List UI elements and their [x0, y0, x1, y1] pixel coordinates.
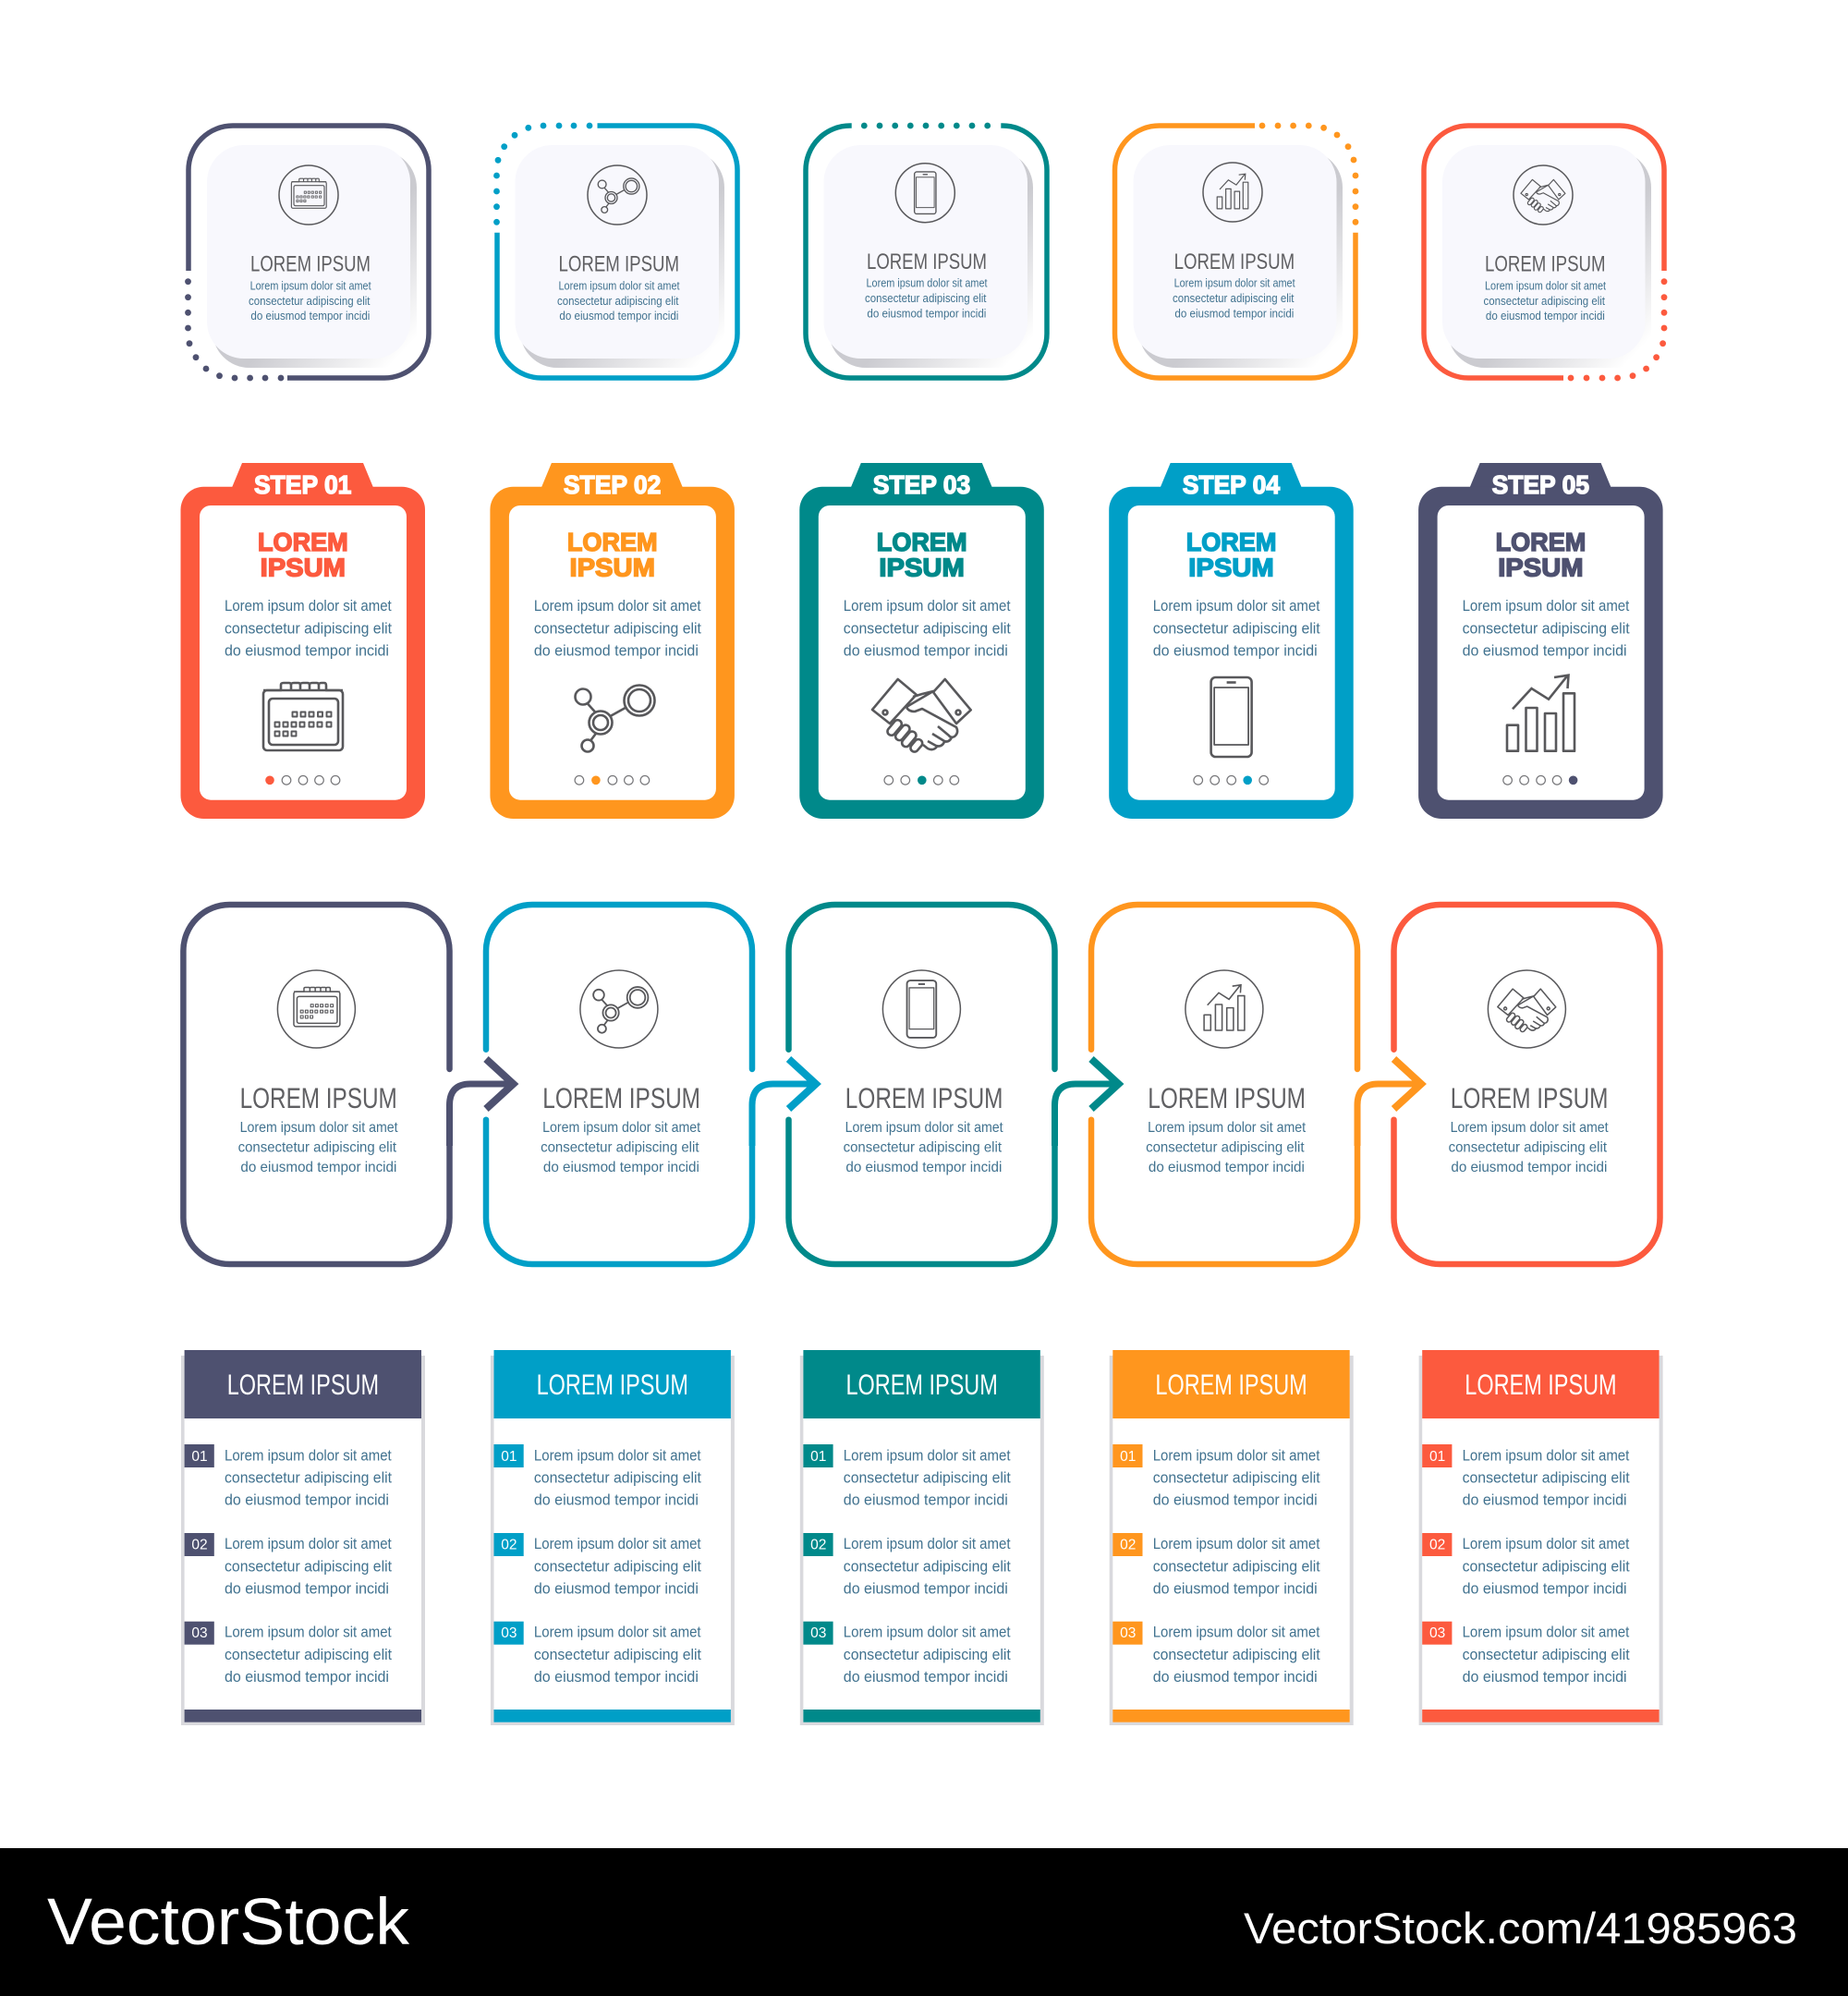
panel: list card coral: do eiusmod tempor incidi: [1463, 1669, 1627, 1686]
panel: step 02: consectetur adipiscing elit: [534, 621, 701, 638]
panel: card 2 blue: do eiusmod tempor incidi: [559, 309, 678, 323]
panel: list card coral: [1419, 1350, 1663, 1725]
arrow: card 1 to card 2: [449, 1059, 514, 1146]
panel: list card blue: consectetur adipiscing elit: [534, 1470, 701, 1487]
panel: list card navy: 03: [191, 1625, 208, 1641]
panel: list card navy: [181, 1350, 425, 1725]
panel: list card navy: 01: [191, 1449, 208, 1465]
panel: card 1 navy: Lorem ipsum dolor sit amet: [250, 278, 371, 292]
panel: list card teal: [800, 1350, 1044, 1725]
panel: card 5 coral: [1424, 126, 1667, 381]
panel: step 04: STEP 04: [1183, 470, 1280, 499]
panel: list card teal: 02: [810, 1538, 826, 1553]
panel: step 01: LOREM: [258, 528, 348, 556]
panel: step 02: do eiusmod tempor incidi: [534, 643, 699, 660]
panel: list card blue: Lorem ipsum dolor sit amet: [534, 1536, 701, 1552]
panel: list card orange: LOREM IPSUM: [1155, 1368, 1307, 1401]
panel: list card orange: [1110, 1350, 1354, 1725]
panel: step 02: Lorem ipsum dolor sit amet: [534, 598, 701, 615]
panel: list card teal: do eiusmod tempor incidi: [844, 1492, 1008, 1509]
row 3: connected outline cards with arrows: [183, 905, 1660, 1264]
panel: flow card 1: consectetur adipiscing elit: [238, 1140, 397, 1155]
panel: step 04: Lorem ipsum dolor sit amet: [1153, 598, 1320, 615]
panel: step 05: LOREM: [1496, 528, 1586, 556]
panel: flow card 5: LOREM IPSUM: [1451, 1081, 1608, 1114]
panel: step 04: do eiusmod tempor incidi: [1153, 643, 1318, 660]
panel: list card teal: 03: [810, 1625, 826, 1641]
panel: list card coral: Lorem ipsum dolor sit amet: [1463, 1447, 1630, 1464]
panel: list card blue: do eiusmod tempor incidi: [534, 1580, 699, 1597]
panel: card 1 navy: consectetur adipiscing elit: [249, 294, 371, 308]
panel: list card coral: 02: [1429, 1538, 1445, 1553]
panel: step 02: IPSUM: [569, 553, 655, 582]
panel: list card teal: Lorem ipsum dolor sit amet: [844, 1625, 1011, 1641]
panel: flow card 4: do eiusmod tempor incidi: [1149, 1160, 1305, 1175]
panel: list card blue: do eiusmod tempor incidi: [534, 1492, 699, 1509]
panel: card 5 coral: LOREM IPSUM: [1485, 251, 1606, 277]
panel: step 05: Lorem ipsum dolor sit amet: [1463, 598, 1630, 615]
panel: list card teal: do eiusmod tempor incidi: [844, 1580, 1008, 1597]
panel: flow card 5: consectetur adipiscing elit: [1449, 1140, 1608, 1155]
panel: list card orange: 03: [1120, 1625, 1136, 1641]
panel: step 03: Lorem ipsum dolor sit amet: [844, 598, 1011, 615]
panel: list card coral: consectetur adipiscing elit: [1463, 1470, 1630, 1487]
panel: flow card 2: consectetur adipiscing elit: [541, 1140, 699, 1155]
panel: flow card 4: LOREM IPSUM: [1148, 1081, 1306, 1114]
panel: list card coral: consectetur adipiscing elit: [1463, 1647, 1630, 1663]
panel: list card blue: 02: [501, 1538, 517, 1553]
panel: list card coral: LOREM IPSUM: [1465, 1368, 1617, 1401]
panel: card 1 navy: [185, 126, 429, 381]
panel: step 04: IPSUM: [1188, 553, 1274, 582]
panel: flow card 4: [1091, 905, 1357, 1264]
panel: list card navy: consectetur adipiscing elit: [225, 1470, 392, 1487]
panel: card 2 blue: consectetur adipiscing elit: [557, 294, 679, 308]
panel: list card navy: LOREM IPSUM: [227, 1368, 379, 1401]
panel: list card teal: do eiusmod tempor incidi: [844, 1669, 1008, 1686]
panel: list card orange: Lorem ipsum dolor sit amet: [1153, 1625, 1320, 1641]
panel: list card blue: consectetur adipiscing elit: [534, 1558, 701, 1575]
panel: list card coral: 03: [1429, 1625, 1445, 1641]
footer: black watermark band: VectorStock: [47, 1886, 410, 1959]
panel: list card navy: Lorem ipsum dolor sit amet: [225, 1625, 392, 1641]
panel: list card blue: do eiusmod tempor incidi: [534, 1669, 699, 1686]
arrow: card 3 to card 4: [1055, 1059, 1118, 1146]
panel: step 05: [1418, 463, 1663, 819]
panel: flow card 2: [486, 905, 752, 1264]
panel: list card blue: Lorem ipsum dolor sit amet: [534, 1625, 701, 1641]
panel: step 02: STEP 02: [564, 470, 661, 499]
panel: step 01: STEP 01: [254, 470, 351, 499]
panel: flow card 2: LOREM IPSUM: [542, 1081, 700, 1114]
panel: card 4 orange: do eiusmod tempor incidi: [1174, 307, 1294, 320]
panel: list card teal: consectetur adipiscing elit: [844, 1647, 1011, 1663]
panel: list card navy: consectetur adipiscing elit: [225, 1647, 392, 1663]
panel: list card orange: consectetur adipiscing elit: [1153, 1558, 1320, 1575]
panel: list card orange: 01: [1120, 1449, 1136, 1465]
panel: step 05: STEP 05: [1492, 470, 1589, 499]
panel: step 01: IPSUM: [261, 553, 346, 582]
panel: card 4 orange: consectetur adipiscing elit: [1173, 291, 1295, 305]
panel: list card navy: do eiusmod tempor incidi: [225, 1492, 389, 1509]
panel: list card orange: do eiusmod tempor incidi: [1153, 1669, 1318, 1686]
panel: list card teal: Lorem ipsum dolor sit amet: [844, 1536, 1011, 1552]
panel: flow card 1: do eiusmod tempor incidi: [240, 1160, 396, 1175]
panel: list card blue: LOREM IPSUM: [537, 1368, 688, 1401]
panel: flow card 5: do eiusmod tempor incidi: [1451, 1160, 1607, 1175]
panel: step 05: IPSUM: [1498, 553, 1584, 582]
panel: list card navy: consectetur adipiscing elit: [225, 1558, 392, 1575]
panel: step 04: [1109, 463, 1354, 819]
panel: list card blue: 03: [501, 1625, 517, 1641]
panel: step 05: do eiusmod tempor incidi: [1463, 643, 1627, 660]
panel: card 1 navy: do eiusmod tempor incidi: [250, 309, 370, 323]
panel: card 5 coral: consectetur adipiscing elit: [1484, 294, 1605, 308]
panel: card 4 orange: Lorem ipsum dolor sit amet: [1174, 275, 1295, 290]
panel: card 3 teal: Lorem ipsum dolor sit amet: [867, 275, 988, 290]
panel: step 03: consectetur adipiscing elit: [844, 621, 1011, 638]
panel: flow card 3: do eiusmod tempor incidi: [845, 1160, 1002, 1175]
panel: list card teal: consectetur adipiscing elit: [844, 1470, 1011, 1487]
panel: list card orange: 02: [1120, 1538, 1136, 1553]
panel: flow card 5: [1393, 905, 1660, 1264]
panel: card 2 blue: Lorem ipsum dolor sit amet: [558, 278, 680, 292]
panel: list card coral: Lorem ipsum dolor sit amet: [1463, 1536, 1630, 1552]
panel: card 4 orange: LOREM IPSUM: [1174, 250, 1295, 274]
panel: list card blue: [491, 1350, 735, 1725]
panel: card 3 teal: [806, 123, 1047, 378]
panel: flow card 3: [789, 905, 1055, 1264]
panel: card 3 teal: LOREM IPSUM: [867, 250, 987, 274]
panel: step 02: LOREM: [567, 528, 658, 556]
footer: black watermark band: [0, 1848, 1848, 1996]
footer: black watermark band: VectorStock.com/41985963: [1244, 1905, 1797, 1953]
panel: step 02: [490, 463, 735, 819]
panel: list card coral: Lorem ipsum dolor sit amet: [1463, 1625, 1630, 1641]
panel: step 03: [799, 463, 1044, 819]
panel: list card orange: do eiusmod tempor incidi: [1153, 1580, 1318, 1597]
panel: list card orange: Lorem ipsum dolor sit amet: [1153, 1447, 1320, 1464]
panel: list card orange: do eiusmod tempor incidi: [1153, 1492, 1318, 1509]
panel: card 3 teal: consectetur adipiscing elit: [865, 291, 987, 305]
panel: step 04: LOREM: [1186, 528, 1276, 556]
panel: flow card 5: Lorem ipsum dolor sit amet: [1451, 1120, 1609, 1136]
panel: list card teal: 01: [810, 1449, 826, 1465]
panel: step 03: do eiusmod tempor incidi: [844, 643, 1008, 660]
panel: list card blue: Lorem ipsum dolor sit amet: [534, 1447, 701, 1464]
panel: list card coral: do eiusmod tempor incidi: [1463, 1580, 1627, 1597]
panel: step 03: IPSUM: [879, 553, 965, 582]
panel: list card coral: do eiusmod tempor incidi: [1463, 1492, 1627, 1509]
row 1: rounded cards with dotted outline: [185, 123, 1667, 381]
panel: list card coral: consectetur adipiscing elit: [1463, 1558, 1630, 1575]
panel: list card navy: Lorem ipsum dolor sit amet: [225, 1447, 392, 1464]
arrow: card 2 to card 3: [752, 1059, 816, 1146]
panel: card 2 blue: [493, 123, 737, 378]
panel: list card blue: 01: [501, 1449, 517, 1465]
panel: flow card 1: [183, 905, 449, 1264]
panel: flow card 2: do eiusmod tempor incidi: [543, 1160, 699, 1175]
panel: step 01: do eiusmod tempor incidi: [225, 643, 389, 660]
panel: step 03: LOREM: [877, 528, 967, 556]
row 4: list cards: [181, 1350, 1663, 1725]
panel: card 5 coral: Lorem ipsum dolor sit amet: [1485, 278, 1606, 292]
panel: step 01: consectetur adipiscing elit: [225, 621, 392, 638]
panel: list card navy: Lorem ipsum dolor sit amet: [225, 1536, 392, 1552]
panel: list card teal: Lorem ipsum dolor sit amet: [844, 1447, 1011, 1464]
panel: flow card 3: LOREM IPSUM: [845, 1081, 1003, 1114]
panel: step 01: [181, 463, 425, 819]
panel: flow card 1: Lorem ipsum dolor sit amet: [240, 1120, 398, 1136]
panel: flow card 1: LOREM IPSUM: [240, 1081, 397, 1114]
row 2: step cards: [181, 463, 1663, 819]
panel: list card teal: consectetur adipiscing elit: [844, 1558, 1011, 1575]
panel: list card orange: consectetur adipiscing elit: [1153, 1647, 1320, 1663]
panel: step 03: STEP 03: [873, 470, 970, 499]
panel: card 1 navy: LOREM IPSUM: [250, 251, 371, 277]
arrow: card 4 to card 5: [1357, 1059, 1421, 1146]
panel: flow card 4: consectetur adipiscing elit: [1146, 1140, 1305, 1155]
panel: list card teal: LOREM IPSUM: [845, 1368, 998, 1401]
panel: list card navy: do eiusmod tempor incidi: [225, 1580, 389, 1597]
panel: card 4 orange: [1114, 123, 1358, 378]
panel: step 01: Lorem ipsum dolor sit amet: [225, 598, 392, 615]
panel: step 04: consectetur adipiscing elit: [1153, 621, 1320, 638]
panel: step 05: consectetur adipiscing elit: [1463, 621, 1630, 638]
panel: list card orange: Lorem ipsum dolor sit amet: [1153, 1536, 1320, 1552]
panel: card 2 blue: LOREM IPSUM: [558, 251, 679, 277]
panel: flow card 3: Lorem ipsum dolor sit amet: [845, 1120, 1003, 1136]
panel: card 3 teal: do eiusmod tempor incidi: [867, 307, 986, 320]
panel: flow card 4: Lorem ipsum dolor sit amet: [1148, 1120, 1307, 1136]
panel: list card blue: consectetur adipiscing elit: [534, 1647, 701, 1663]
panel: list card navy: do eiusmod tempor incidi: [225, 1669, 389, 1686]
panel: list card navy: 02: [191, 1538, 208, 1553]
panel: list card coral: 01: [1429, 1449, 1445, 1465]
panel: flow card 2: Lorem ipsum dolor sit amet: [542, 1120, 701, 1136]
panel: flow card 3: consectetur adipiscing elit: [844, 1140, 1003, 1155]
panel: card 5 coral: do eiusmod tempor incidi: [1486, 309, 1605, 323]
panel: list card orange: consectetur adipiscing elit: [1153, 1470, 1320, 1487]
